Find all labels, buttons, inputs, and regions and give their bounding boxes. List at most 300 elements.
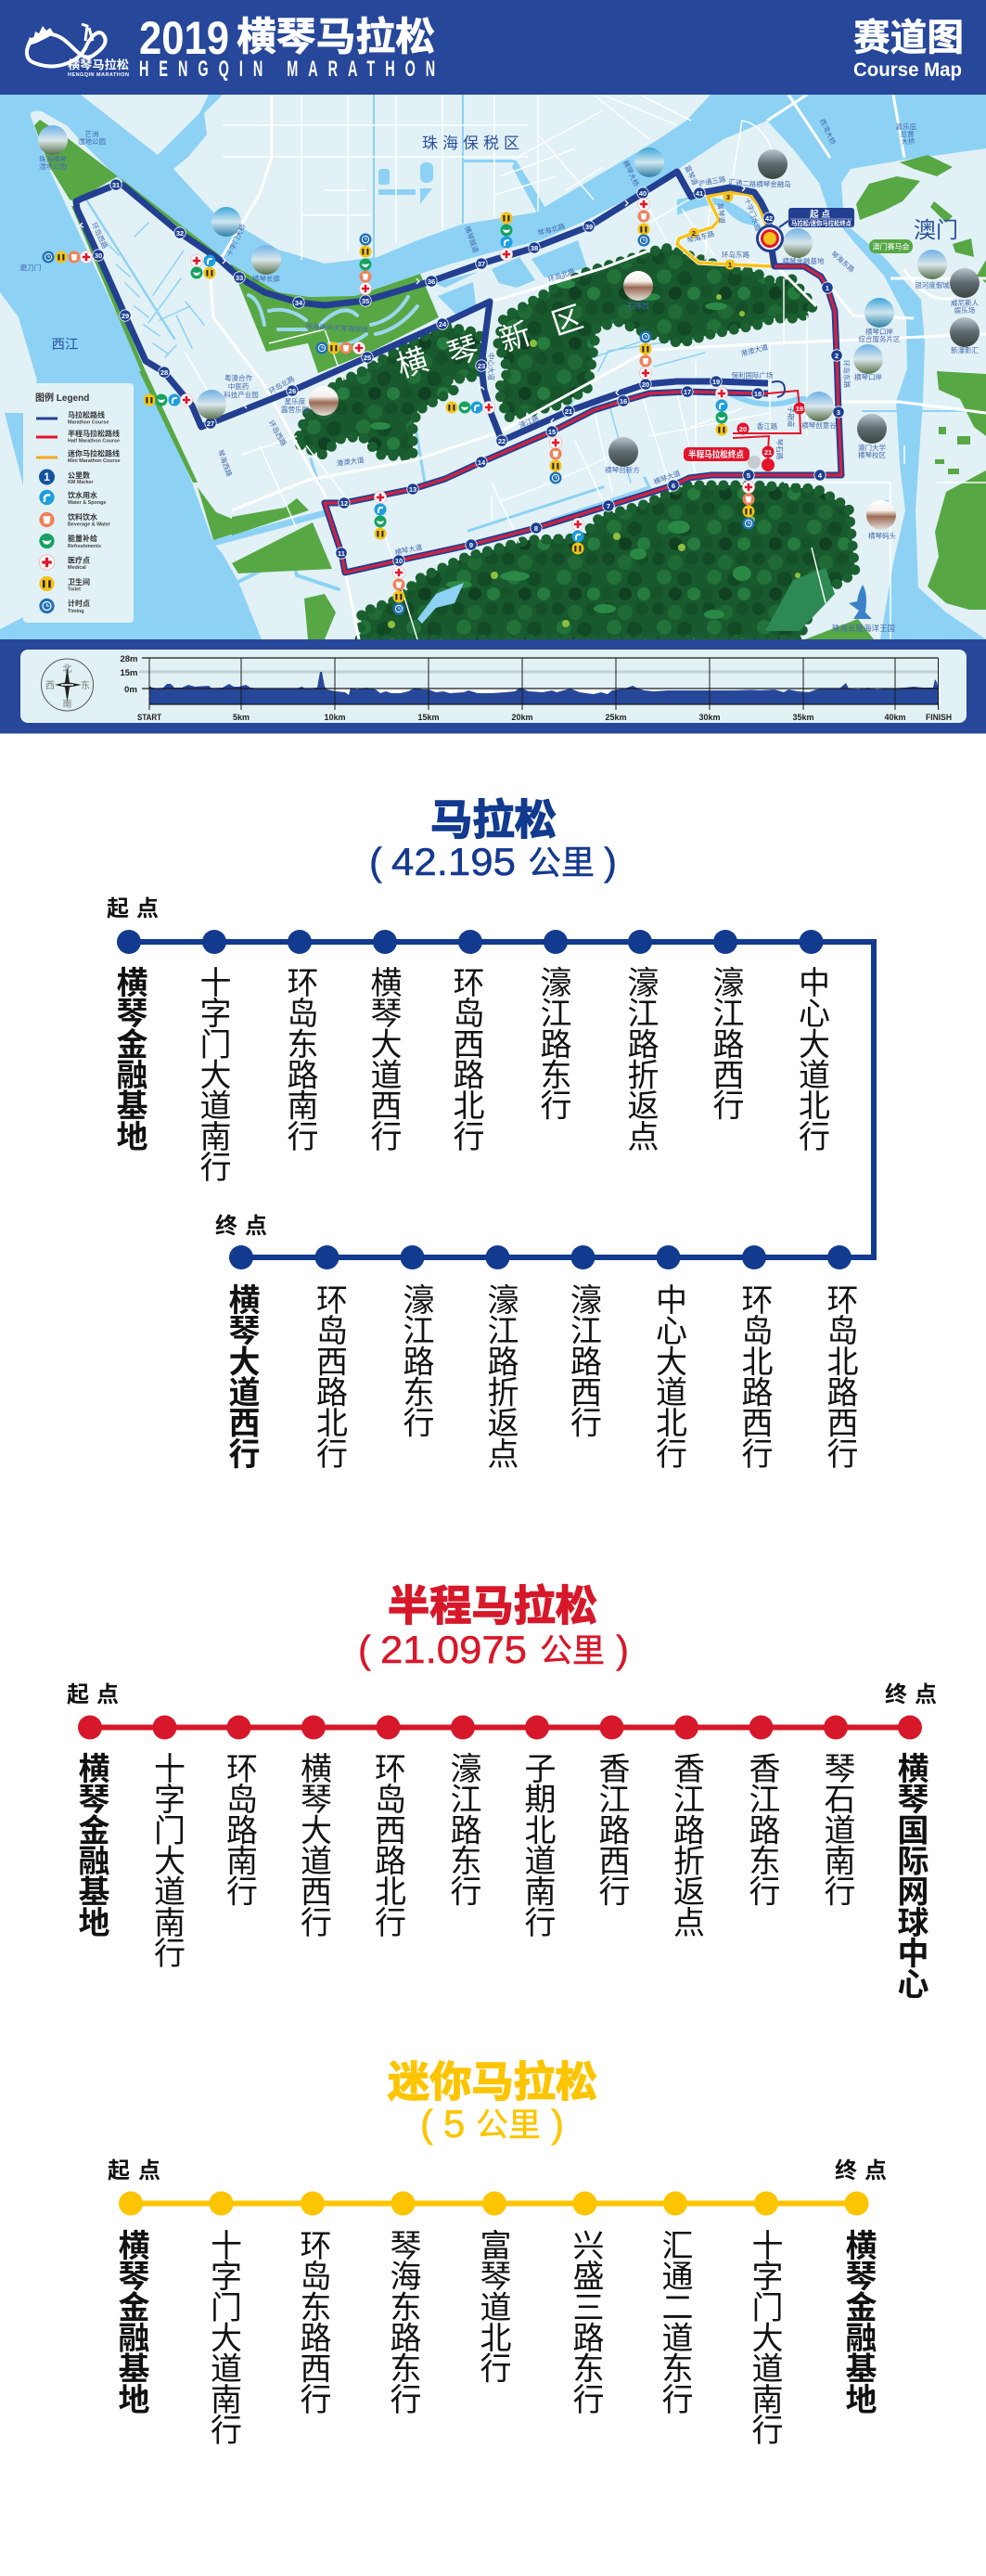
logo: Hengqin Marathon: HENGQIN MARATHON xyxy=(68,72,129,78)
green belts xyxy=(34,120,986,639)
legend: timing: 计时点 xyxy=(68,599,90,608)
logo: Hengqin Marathon: 横琴马拉松 xyxy=(68,58,130,71)
subheading: mini marathon distance: ) xyxy=(551,2102,564,2145)
roads xyxy=(186,95,986,639)
compass: 北 xyxy=(63,663,72,675)
legend: beverage: 饮料饮水 xyxy=(68,512,97,522)
turnaround arrow xyxy=(772,381,785,397)
legend: half marathon course xyxy=(36,429,120,444)
half marathon km markers: 21 xyxy=(764,448,772,457)
forest: north xyxy=(498,248,813,418)
half marathon stop labels: 横琴金融基地 xyxy=(73,1752,109,1937)
road and place labels: 富琴道 xyxy=(683,163,700,187)
elevation axis labels: 10km xyxy=(324,713,346,722)
km markers: 29 xyxy=(122,312,129,320)
km markers: 26 xyxy=(288,387,296,395)
road and place labels: 保利国际广场 xyxy=(731,370,774,380)
half marathon course line xyxy=(325,266,841,573)
half marathon stop labels: 十字门大道南行 xyxy=(148,1752,186,1968)
km markers: 15 xyxy=(548,428,556,436)
half marathon stop labels: 环岛路南行 xyxy=(221,1752,258,1907)
legend: water: Water & Sponge xyxy=(68,500,106,506)
road and place labels: 环岛西路 xyxy=(90,221,110,251)
facility icon stack: km 22 xyxy=(445,401,495,414)
road and place labels: 琴海东路 xyxy=(829,249,857,274)
compass: 东 xyxy=(81,679,90,691)
marathon stop labels, row 2: 环岛北路西行 xyxy=(822,1283,858,1469)
half marathon stop labels: 横琴国际网球中心 xyxy=(892,1752,928,1999)
marathon route stops xyxy=(117,930,852,1269)
marathon stop labels, row 1: 环岛西路北行 xyxy=(448,966,484,1152)
km markers: 7 xyxy=(607,502,610,510)
km markers: 24 xyxy=(439,320,447,328)
road and place labels: 综合服务片区 xyxy=(859,334,901,343)
road and place labels: 粤澳合作 xyxy=(224,373,252,382)
map title right: Course Map xyxy=(853,59,962,81)
mini marathon route stops xyxy=(119,2192,868,2216)
road and place labels: 嘉乐庇 xyxy=(896,122,917,131)
icon: whale shark xyxy=(849,585,872,619)
km markers: 33 xyxy=(236,274,243,282)
compass: 西 xyxy=(45,681,55,691)
title xyxy=(139,12,435,64)
elevation axis labels: 15m xyxy=(121,668,137,677)
legend: medical: Medical xyxy=(68,565,86,571)
marathon stop labels, row 1: 濠江路西行 xyxy=(708,966,744,1121)
elevation axis labels: 28m xyxy=(121,654,137,663)
km markers: 17 xyxy=(684,388,691,396)
road and place labels: 横琴金融岛 xyxy=(756,179,791,188)
elevation panel xyxy=(20,650,967,723)
half marathon stop labels: 子期北道南行 xyxy=(519,1752,556,1938)
legend: marathon course xyxy=(36,410,109,425)
mini marathon stop labels: 环岛东路西行 xyxy=(295,2229,331,2415)
road and place labels: 威尼斯人 xyxy=(951,298,979,307)
km markers: 12 xyxy=(340,499,348,508)
elevation axis labels: 30km xyxy=(698,713,721,722)
road and place labels: 横琴大道 xyxy=(652,468,682,486)
legend: toilet xyxy=(39,576,90,592)
legend: mini marathon course: 迷你马拉松路线 xyxy=(68,449,120,458)
road and place labels: 环岛东路 xyxy=(722,250,749,259)
half marathon stop labels: 濠江路东行 xyxy=(445,1752,481,1907)
elevation axis labels xyxy=(121,654,952,722)
km markers: 13 xyxy=(409,485,416,494)
end label: 终点 xyxy=(835,2158,887,2183)
legend: marathon course: 马拉松路线 xyxy=(68,410,105,419)
legend: km marker: KM Marker xyxy=(68,480,94,485)
legend title: 图例 Legend xyxy=(35,392,89,404)
half marathon route line xyxy=(90,1724,910,1730)
map title right xyxy=(853,18,964,81)
elevation axis labels: 25km xyxy=(605,713,627,722)
facility icon stack: km 17 xyxy=(716,388,727,436)
legend: beverage xyxy=(39,512,111,527)
facility icon stack: km 35 xyxy=(360,234,371,295)
half marathon stop labels: 环岛西路北行 xyxy=(369,1752,406,1938)
km markers xyxy=(93,179,844,566)
forest: central xyxy=(297,327,482,457)
road and place labels: 石博园 xyxy=(628,301,648,310)
road and place labels xyxy=(20,117,979,633)
legend: refreshments xyxy=(39,534,101,549)
mini marathon stop labels: 十字门大道南行 xyxy=(747,2229,783,2445)
district label: Hengqin New Area xyxy=(392,299,587,384)
km markers: 16 xyxy=(620,397,627,406)
mini marathon stop labels xyxy=(113,2229,877,2445)
road and place labels: 新濠影汇 xyxy=(951,345,979,354)
half marathon stop labels: 横琴大道西行 xyxy=(295,1752,332,1938)
elevation band xyxy=(0,639,986,733)
road and place labels: 星乐度 xyxy=(285,396,306,406)
title: 横琴马拉松 xyxy=(237,15,435,58)
road and place labels: 澳门大学 xyxy=(858,443,886,452)
road and place labels: 横琴大道 xyxy=(394,542,424,557)
road and place labels: 濠江路 xyxy=(518,413,541,430)
legend: mini marathon course: Mini Marathon Course xyxy=(68,458,121,464)
facility icon stack: km 12 xyxy=(375,492,386,540)
facility icon stack: km 10 xyxy=(393,566,404,614)
road and place labels: 十字门水道 xyxy=(743,197,763,233)
km markers: 4 xyxy=(818,471,823,480)
end label: 终点 xyxy=(885,1682,937,1707)
half marathon stop labels: 琴石道南行 xyxy=(819,1752,855,1907)
road and place labels: 银河度假城 xyxy=(915,280,950,290)
marathon section xyxy=(107,796,874,1469)
road and place labels: 香江路 xyxy=(757,421,778,431)
forest highlights and lake xyxy=(370,279,835,631)
road and place labels: 琴海西路 xyxy=(216,448,235,478)
mini marathon route line xyxy=(131,2201,857,2207)
km markers: 42 xyxy=(765,214,773,223)
facility icon stack: km 37 xyxy=(501,212,512,260)
km markers: 38 xyxy=(531,244,538,252)
half marathon stop labels: 香江路折返点 xyxy=(668,1752,703,1938)
subheading: mini marathon distance: 公里 xyxy=(476,2107,541,2144)
legend: toilet: Toilet xyxy=(68,586,81,592)
km markers: 25 xyxy=(364,354,371,362)
road and place labels: 十字门大桥 xyxy=(224,222,248,258)
facility icon stack: km 15 xyxy=(549,436,562,484)
km markers: 30 xyxy=(95,251,102,260)
heading: half marathon: 半程马拉松 xyxy=(388,1582,597,1629)
facility icon stack: km 32 xyxy=(191,254,215,278)
road and place labels: 露营乐园 xyxy=(281,405,309,414)
marathon stop labels, row 1 xyxy=(111,966,829,1182)
half marathon stop labels xyxy=(73,1752,928,1999)
facility icon stack: km 40 xyxy=(638,199,649,247)
marathon course line xyxy=(76,172,841,573)
mini marathon km markers: 2 xyxy=(692,229,696,238)
start callout: 马拉松/迷你马拉松终点 xyxy=(791,219,852,227)
km markers: 22 xyxy=(498,437,506,445)
road and place labels: 中心大道 xyxy=(487,353,496,380)
road and place labels: 环岛北路 xyxy=(546,266,576,284)
facility icon stack: km 7 xyxy=(571,518,584,555)
mini marathon stop labels: 汇通二道东行 xyxy=(657,2229,693,2415)
road and place labels: 横琴金融基地 xyxy=(783,256,825,265)
km markers: 8 xyxy=(534,524,538,533)
km markers: 18 xyxy=(754,390,762,398)
km markers: 1 xyxy=(826,284,829,292)
road and place labels: 横琴创意谷 xyxy=(801,420,837,430)
km markers: 3 xyxy=(837,408,840,417)
km markers: 41 xyxy=(696,189,703,198)
facility icon stack: km 5 xyxy=(742,481,755,529)
km markers: 39 xyxy=(585,223,593,231)
road and place labels: 磨刀门 xyxy=(20,263,41,272)
legend: km marker: 公里数 xyxy=(68,470,90,480)
km markers: 5 xyxy=(747,471,750,480)
road and place labels: 琴海东路 xyxy=(685,228,715,245)
road and place labels: 环岛东路 xyxy=(841,360,852,389)
marathon stop labels, row 2 xyxy=(224,1283,858,1469)
legend: km marker: 1 xyxy=(44,470,50,483)
half marathon route stops xyxy=(78,1715,922,1739)
marathon stop labels, row 2: 濠江路西行 xyxy=(566,1283,601,1438)
half marathon stop labels: 香江路西行 xyxy=(594,1752,630,1907)
road and place labels: 横琴长廊 xyxy=(252,274,280,283)
start marker xyxy=(756,221,788,252)
district label: Hengqin New Area: 横 xyxy=(392,341,432,384)
road and place labels: 芒洲 xyxy=(85,129,98,138)
mini marathon stop labels: 横琴金融基地 xyxy=(840,2229,877,2414)
header banner xyxy=(0,0,986,95)
legend: medical: 医疗点 xyxy=(68,555,90,564)
marathon stop labels, row 1: 中心大道北行 xyxy=(794,966,829,1152)
elevation axis labels: 5km xyxy=(233,713,250,722)
road and place labels: 西湾大桥 xyxy=(818,117,839,147)
Macau Jockey Club pill xyxy=(869,239,913,253)
district label: Hengqin New Area: 区 xyxy=(547,299,587,341)
legend: mini marathon course xyxy=(36,449,121,464)
legend: half marathon course: Half Marathon Course xyxy=(68,438,120,444)
road and place labels: 珠海南中天育海球场 xyxy=(305,321,369,334)
road and place labels: 环岛西路 xyxy=(267,419,289,447)
subtitle: HENGQIN MARATHON xyxy=(139,57,435,82)
km markers: 10 xyxy=(395,557,403,565)
half marathon km markers: 19 xyxy=(796,405,803,413)
legend: timing xyxy=(39,599,90,614)
km markers: 23 xyxy=(478,362,485,370)
facility icon stack: west gate xyxy=(43,251,93,264)
marathon stop labels, row 2: 濠江路东行 xyxy=(398,1283,434,1438)
start callout: 起点 xyxy=(810,209,833,220)
end label: 终点 xyxy=(215,1214,267,1239)
mini marathon km markers xyxy=(688,191,735,269)
heading: mini marathon: 迷你马拉松 xyxy=(388,2058,597,2106)
km markers: 2 xyxy=(835,352,839,360)
start label: 起点 xyxy=(108,2158,160,2183)
district label: Hengqin New Area: 琴 xyxy=(443,329,483,372)
km markers: 9 xyxy=(469,541,473,549)
road and place labels: 娱乐场 xyxy=(954,305,976,315)
subheading: half marathon distance: 公里 xyxy=(540,1633,605,1669)
km markers: 14 xyxy=(478,458,486,467)
ponds and canals xyxy=(378,160,889,503)
legend: beverage: Beverage & Water xyxy=(68,522,111,527)
road and place labels: 港澳大道 xyxy=(336,455,365,468)
mini marathon stop labels: 横琴金融基地 xyxy=(113,2229,149,2414)
subheading: mini marathon distance: ( xyxy=(420,2102,433,2145)
half marathon section xyxy=(67,1582,937,1999)
marathon stop labels, row 1: 濠江路东行 xyxy=(535,966,571,1121)
road and place labels: 横琴创新方 xyxy=(605,465,640,474)
mini marathon km markers: 1 xyxy=(728,261,732,269)
road and place labels: 横琴码头 xyxy=(868,531,896,540)
elevation axis labels: FINISH xyxy=(926,713,952,722)
direction chevrons xyxy=(80,186,745,424)
elevation chart xyxy=(121,654,952,722)
mini marathon course outline xyxy=(677,192,772,266)
road and place labels: 总督 xyxy=(900,129,915,138)
mini marathon stop labels: 富琴道北行 xyxy=(475,2229,511,2384)
course map xyxy=(0,95,986,639)
road and place labels: 横琴校区 xyxy=(858,450,886,459)
district label: Macau: 澳门 xyxy=(914,218,958,243)
subheading: mini marathon distance: 5 xyxy=(443,2102,465,2145)
wetland water xyxy=(249,295,417,344)
elevation axis labels: 40km xyxy=(884,713,906,722)
legend: marathon course: Marathon Course xyxy=(68,419,109,425)
km markers: 27 xyxy=(207,419,214,428)
half marathon finish leg xyxy=(733,391,800,465)
road and place labels: 富琴道 xyxy=(716,202,727,225)
legend: medical xyxy=(39,555,90,571)
marathon stop labels, row 2: 横琴大道西行 xyxy=(224,1283,260,1469)
legend: toilet: 卫生间 xyxy=(68,577,90,586)
compass: 南 xyxy=(63,698,72,710)
half marathon finish callout xyxy=(684,447,749,461)
road and place labels: 中医药 xyxy=(228,381,250,391)
marathon stop labels, row 2: 濠江路折返点 xyxy=(482,1283,518,1469)
compass xyxy=(41,659,93,711)
subheading: half marathon distance: ( xyxy=(358,1628,371,1671)
subheading: half marathon distance: 21.0975 xyxy=(380,1628,527,1671)
Macau Jockey Club pill: 澳门赛马会 xyxy=(872,241,909,251)
km markers: 37 xyxy=(478,260,485,268)
road and place labels: 汇通二路 xyxy=(728,177,757,188)
marathon stop labels, row 1: 横琴大道西行 xyxy=(365,966,402,1152)
marathon stop labels, row 1: 环岛东路南行 xyxy=(282,966,318,1152)
legend: water xyxy=(39,490,106,506)
mini marathon km markers: 3 xyxy=(726,193,730,201)
elevation axis labels: 20km xyxy=(511,713,533,722)
start label: 起点 xyxy=(67,1682,119,1707)
km markers: 20 xyxy=(642,380,649,389)
half marathon km markers: 20 xyxy=(739,425,747,433)
elevation axis labels: 0m xyxy=(124,685,137,694)
road and place labels: 横琴口岸 xyxy=(865,327,893,336)
road and place labels: 子期道 xyxy=(787,406,796,428)
road and place labels: 琴海北路 xyxy=(536,221,566,238)
road and place labels: 横琴隧道 xyxy=(463,225,481,254)
facility icon stack: km 25 xyxy=(315,341,365,354)
road and place labels: 大桥 xyxy=(902,136,916,146)
marathon stop labels, row 1: 十字门大道南行 xyxy=(195,966,231,1182)
half marathon stop labels: 香江路东行 xyxy=(744,1752,780,1907)
subheading: marathon distance: ) xyxy=(604,840,617,883)
land masses xyxy=(0,95,986,639)
heading: marathon: 马拉松 xyxy=(430,796,557,844)
km markers: 34 xyxy=(295,299,303,307)
half marathon finish marker xyxy=(748,456,775,471)
legend: refreshments: Refreshments xyxy=(68,544,101,549)
legend: refreshments: 能量补给 xyxy=(68,534,97,543)
marathon stop labels, row 1: 横琴金融基地 xyxy=(111,966,147,1151)
landmark photo circles xyxy=(38,125,980,530)
road and place labels: 环岛北路 xyxy=(267,373,296,395)
km markers: 32 xyxy=(176,229,184,238)
km markers: 11 xyxy=(338,549,345,558)
marathon stop labels, row 2: 中心大道北行 xyxy=(651,1283,686,1469)
title: 2019 xyxy=(139,12,229,64)
km markers: 31 xyxy=(112,181,120,189)
road and place labels: 湿地公园 xyxy=(78,136,106,146)
subheading: marathon distance: 公里 xyxy=(528,844,595,882)
legend panel xyxy=(23,383,134,623)
km markers: 21 xyxy=(565,407,572,416)
mini marathon stop labels: 兴盛三路东行 xyxy=(568,2229,604,2415)
subheading: half marathon distance: ) xyxy=(616,1628,629,1671)
facility icon stack: km 27 xyxy=(143,393,193,406)
km markers: 40 xyxy=(639,189,647,198)
marathon stop labels, row 2: 环岛北路西行 xyxy=(736,1283,773,1469)
legend: half marathon course: 半程马拉松路线 xyxy=(68,429,120,438)
start callout xyxy=(788,208,854,227)
road and place labels: 横琴大桥 xyxy=(621,159,642,188)
elevation axis labels: 15km xyxy=(417,713,440,722)
mini marathon course line xyxy=(677,192,772,266)
elevation axis labels: 35km xyxy=(792,713,814,722)
start label: 起点 xyxy=(107,896,159,921)
km markers: 6 xyxy=(672,482,675,490)
half marathon km markers xyxy=(736,403,805,458)
district label: Hengqin New Area: 新 xyxy=(495,316,535,358)
subheading: marathon distance: ( xyxy=(369,840,382,883)
legend: km marker xyxy=(39,470,94,485)
legend: water: 饮水用水 xyxy=(68,490,97,499)
km markers: 35 xyxy=(362,297,369,305)
map title right: 赛道图 xyxy=(853,18,964,58)
half marathon finish callout: 半程马拉松终点 xyxy=(688,449,744,460)
road and place labels: 珠海长隆海洋王国 xyxy=(832,624,895,633)
km markers: 36 xyxy=(428,277,435,286)
district label: Xijiang: 西江 xyxy=(52,337,78,353)
marathon stop labels, row 1: 濠江路折返点 xyxy=(622,966,658,1152)
road and place labels: 湿地公园 xyxy=(39,161,67,171)
road and place labels: 科技产业园 xyxy=(224,390,259,399)
road and place labels: 港澳大道 xyxy=(739,341,769,358)
logo: Hengqin Marathon xyxy=(26,24,130,78)
marathon stop labels, row 2: 环岛西路北行 xyxy=(312,1283,347,1469)
facility icon stack: km 20 xyxy=(640,330,651,379)
road and place labels: 横琴口岸 xyxy=(854,372,882,381)
mini marathon section xyxy=(108,2058,887,2445)
km markers: 28 xyxy=(160,368,168,377)
district label: Zhuhai bonded zone: 珠海保税区 xyxy=(422,135,524,152)
elevation axis labels: START xyxy=(137,713,161,722)
marathon route line xyxy=(129,942,874,1257)
km markers: 19 xyxy=(712,378,720,386)
forest: south xyxy=(360,485,855,639)
subheading: marathon distance: 42.195 xyxy=(391,840,516,883)
legend: timing: Timing xyxy=(68,609,84,614)
road and place labels: 沪通三路 xyxy=(698,174,727,188)
road and place labels: 琴石路 xyxy=(775,439,785,460)
mini marathon stop labels: 十字门大道南行 xyxy=(206,2229,241,2445)
road and place labels: 珠海横琴 xyxy=(39,154,67,163)
